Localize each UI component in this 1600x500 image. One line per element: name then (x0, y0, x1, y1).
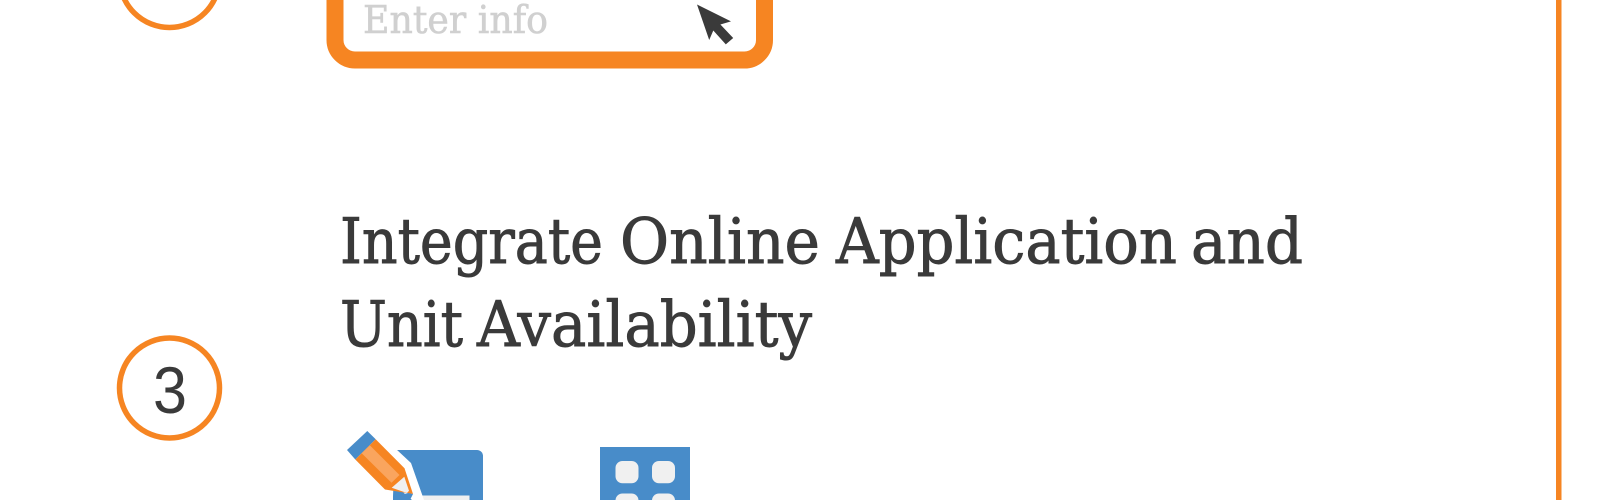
heading: Integrate Online Application and Unit Availability (340, 205, 1303, 361)
icon: unit availability grid (600, 447, 690, 500)
pencil highlight (362, 446, 400, 483)
icon: application form with pencil (347, 431, 483, 500)
input box (335, 0, 764, 60)
heading: Integrate Online Application and Unit Availability: Availability (476, 288, 812, 361)
heading: Integrate Online Application and Unit Availability: Online (620, 205, 820, 278)
step 3 number circle (120, 338, 220, 438)
heading: Integrate Online Application and Unit Availability: Integrate (340, 205, 603, 278)
number 3: 3 (153, 353, 187, 427)
pencil point (393, 493, 413, 500)
pencil body (355, 439, 413, 494)
heading: Integrate Online Application and Unit Availability: Application (835, 205, 1177, 278)
pencil eraser (347, 431, 376, 460)
heading: Integrate Online Application and Unit Availability: Unit (340, 288, 463, 361)
form sheet (393, 450, 483, 500)
right orange border line (1556, 0, 1562, 500)
heading: Integrate Online Application and Unit Availability: and (1191, 205, 1303, 278)
pencil tip (392, 477, 409, 493)
form field (420, 496, 470, 500)
step 2 number circle (120, 0, 220, 28)
icon: mouse cursor (697, 4, 733, 44)
pencil halo (372, 449, 424, 500)
